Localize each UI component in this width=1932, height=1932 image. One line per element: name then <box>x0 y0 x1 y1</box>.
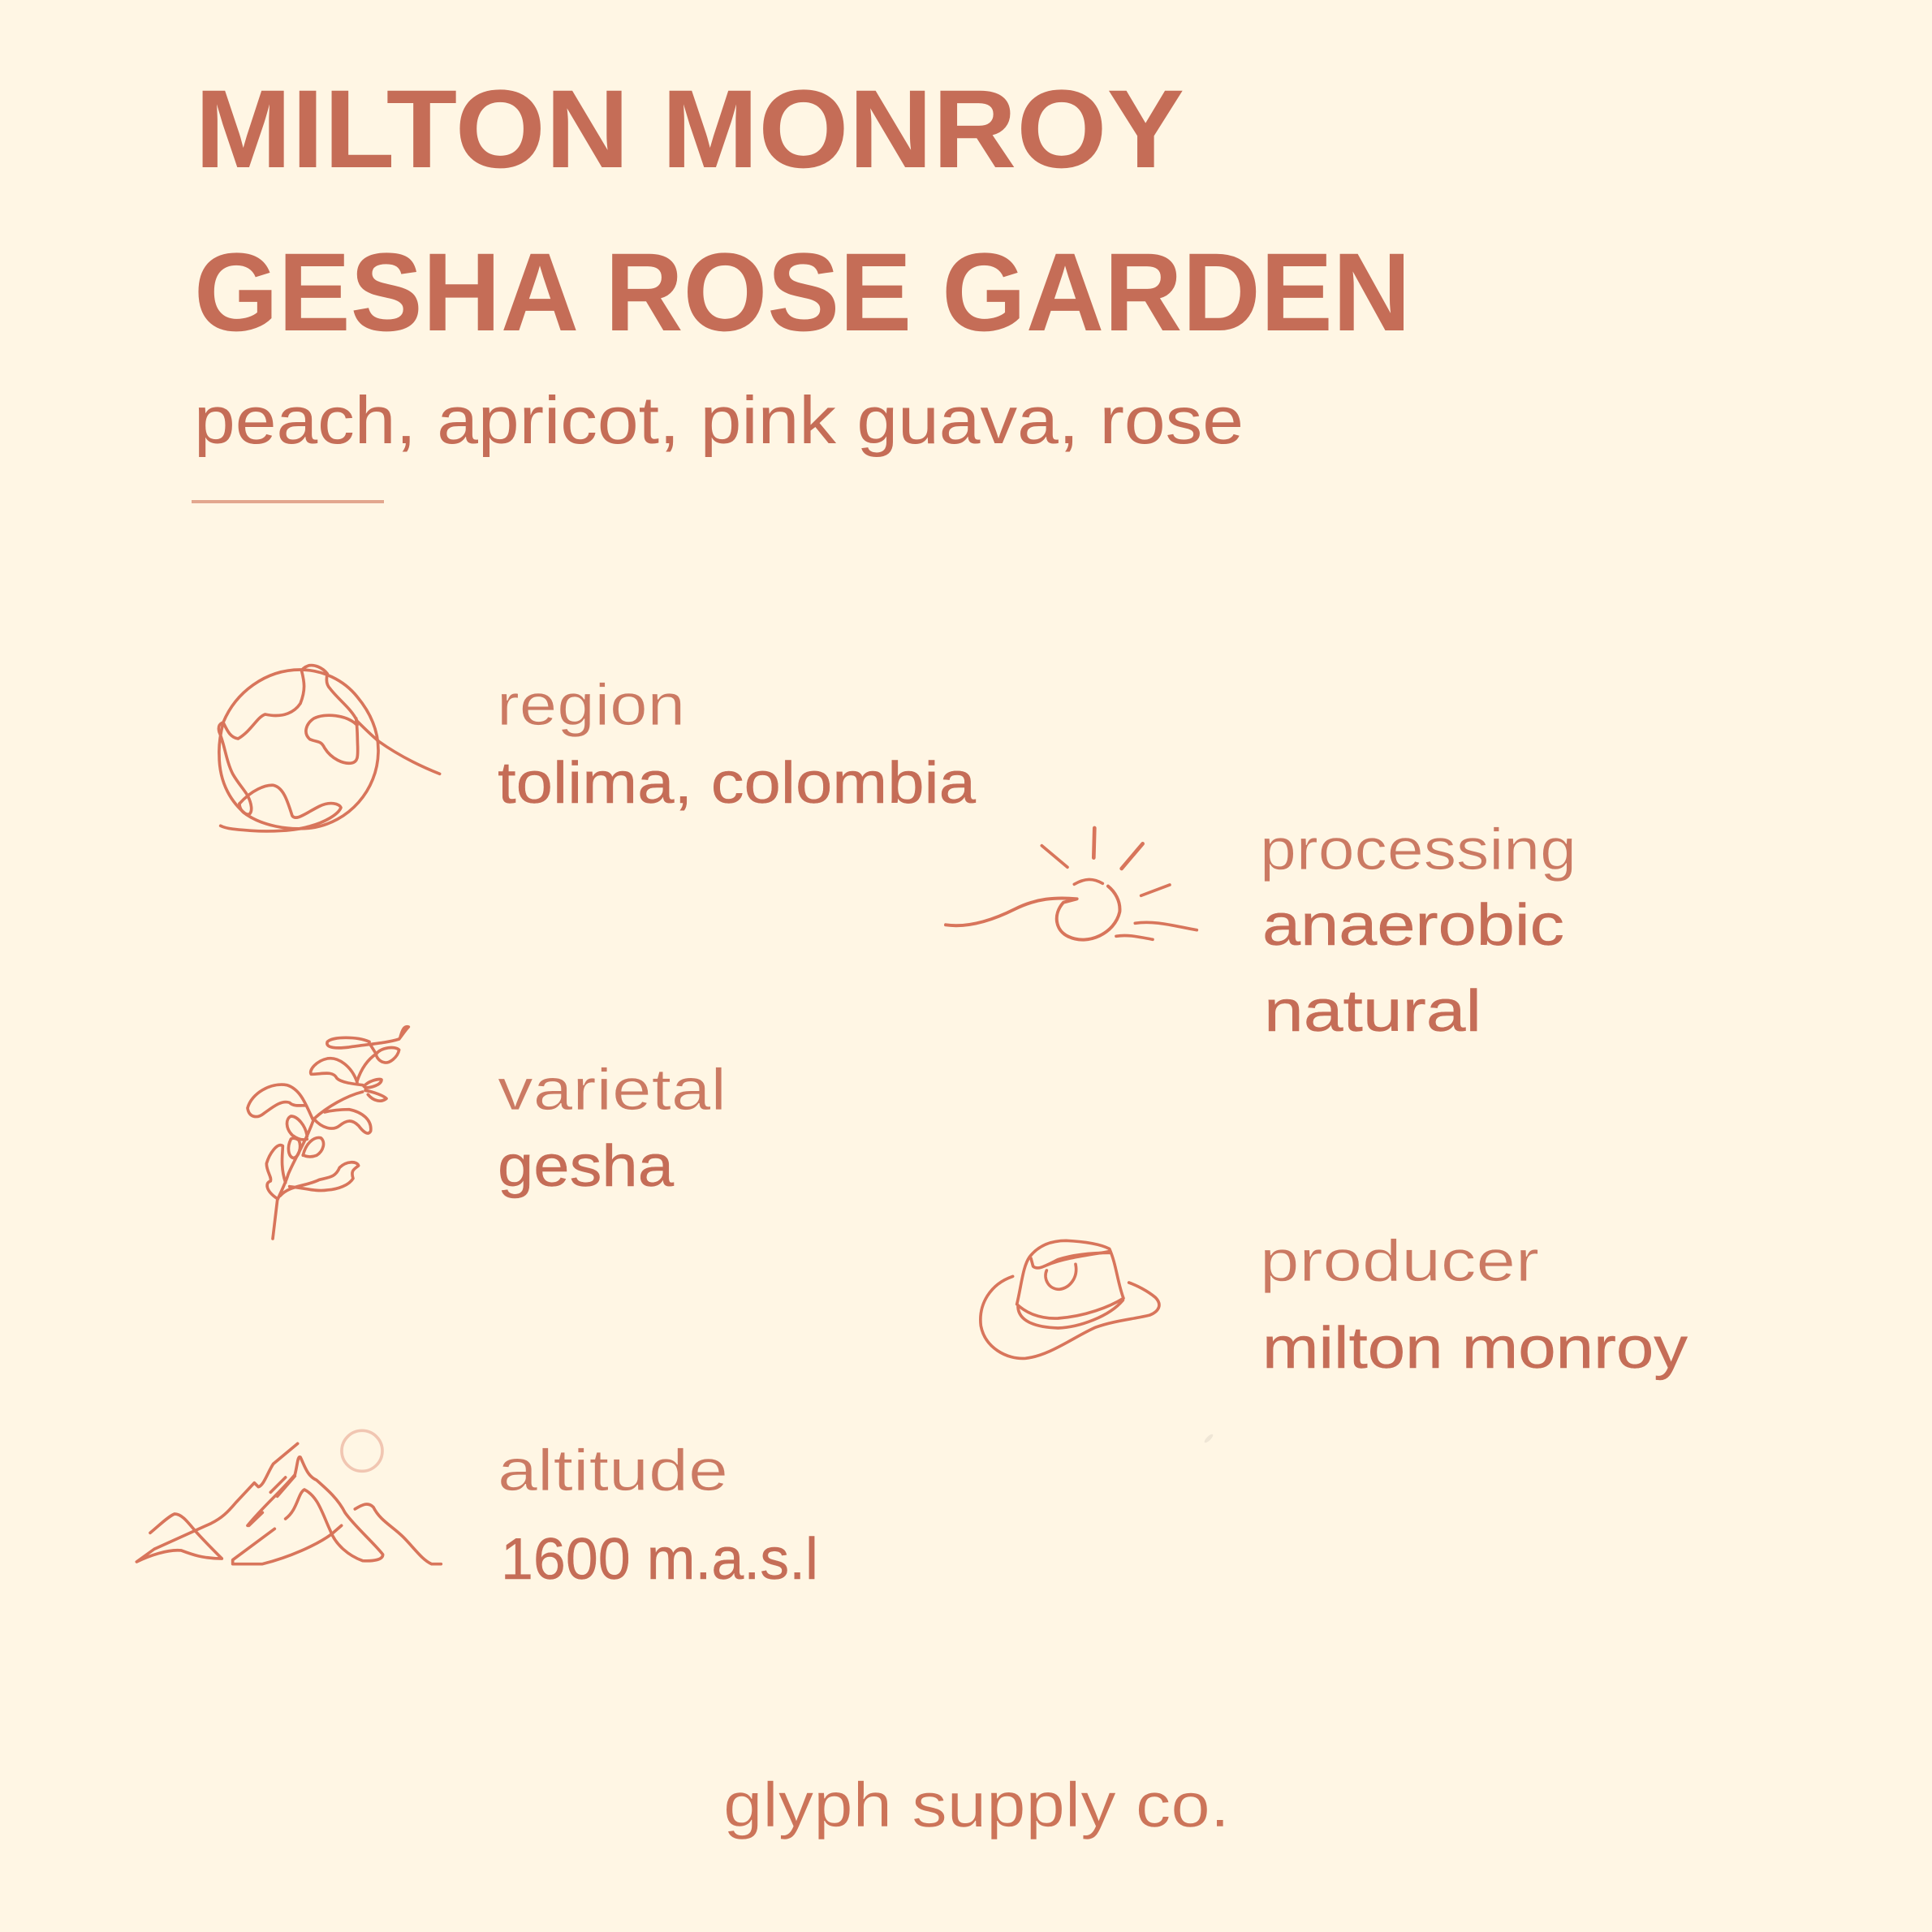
label: producer: producer <box>1260 1229 1539 1294</box>
panel: varietal <box>248 1027 727 1239</box>
label: processing: processing <box>1260 817 1576 882</box>
icon: hat <box>981 1240 1159 1358</box>
label: region: region <box>497 673 685 738</box>
value: gesha: gesha <box>498 1134 675 1199</box>
title: GESHA ROSE GARDEN <box>194 231 1411 355</box>
icon: coffee branch <box>248 1027 408 1239</box>
footer brand: glyph supply co. <box>723 1769 1230 1840</box>
panel: processing <box>946 817 1576 1044</box>
icon: sun and wave <box>946 828 1197 940</box>
value: milton monroy: milton monroy <box>1262 1316 1688 1381</box>
title <box>194 67 1411 355</box>
tasting notes subtitle: peach, apricot, pink guava, rose <box>194 382 1244 458</box>
icon: mountains and moon <box>136 1430 441 1564</box>
panel: region <box>218 666 977 831</box>
label: altitude: altitude <box>498 1438 728 1503</box>
value: tolima, colombia: tolima, colombia <box>498 751 977 816</box>
panel: altitude <box>136 1430 818 1592</box>
icon: globe <box>218 666 440 831</box>
panel: producer <box>981 1229 1688 1381</box>
value: 1600 m.a.s.l: 1600 m.a.s.l <box>501 1527 818 1592</box>
title: MILTON MONROY <box>195 67 1184 192</box>
label: varietal: varietal <box>498 1058 727 1123</box>
value: anaerobic: anaerobic <box>1262 893 1564 958</box>
value: natural: natural <box>1264 979 1481 1044</box>
